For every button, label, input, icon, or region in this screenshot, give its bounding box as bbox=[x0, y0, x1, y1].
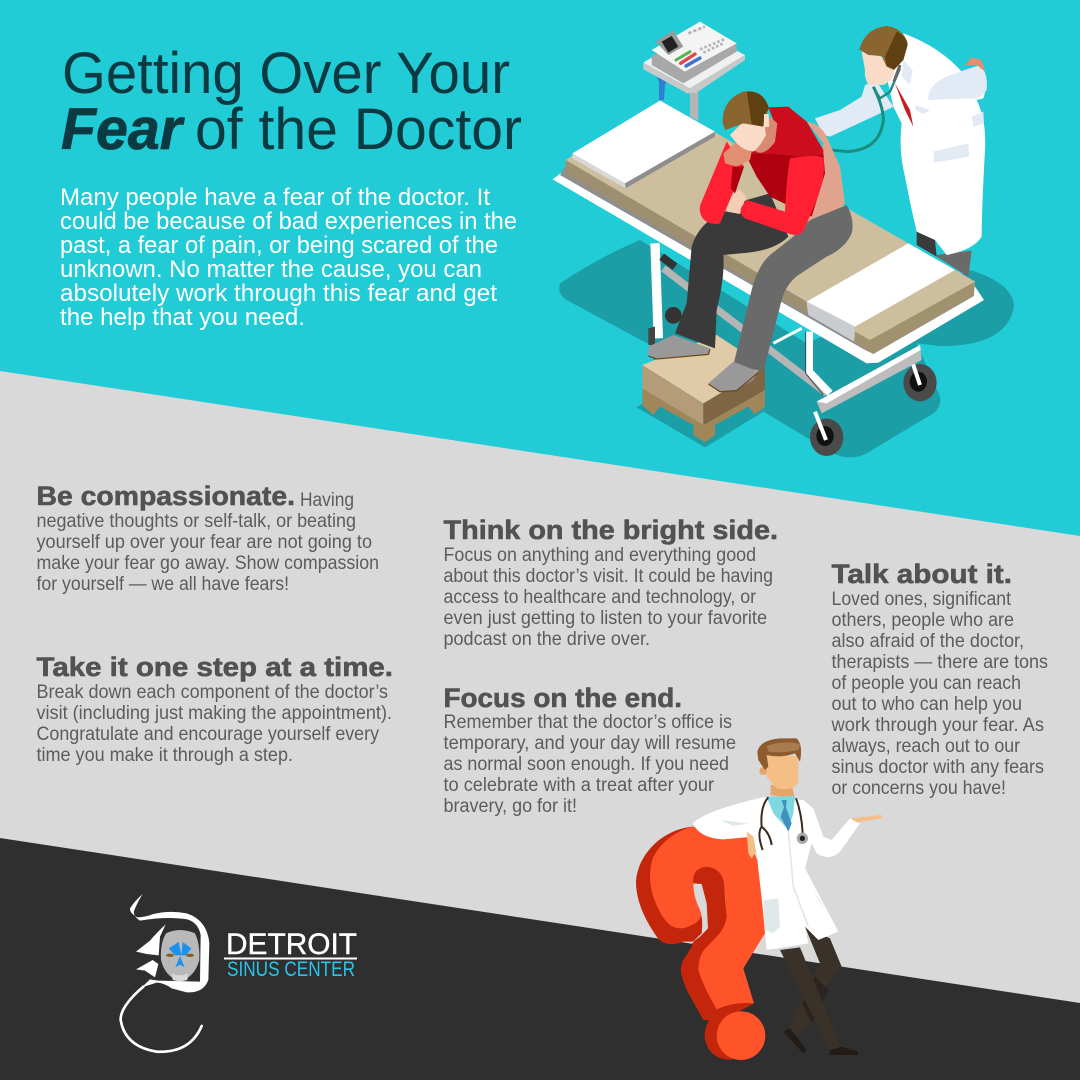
tip: talk about it: work through your fear. As bbox=[831, 715, 1044, 736]
tip: take it one step at a time: Break down each component of the doctor’s bbox=[36, 682, 388, 703]
tip: be compassionate: for yourself — we all have fears! bbox=[36, 574, 289, 595]
intro paragraph: past, a fear of pain, or being scared of the bbox=[60, 232, 498, 259]
title: Fear bbox=[61, 97, 185, 162]
logo: Detroit Sinus Center: SINUS CENTER bbox=[227, 958, 355, 981]
tip: take it one step at a time: visit (including just making the appointment). bbox=[36, 703, 392, 724]
tip: focus on the end: Focus on the end. bbox=[444, 683, 682, 713]
tip: be compassionate bbox=[36, 481, 379, 595]
tip: talk about it: Loved ones, significant bbox=[832, 589, 1012, 610]
tip: focus on the end: Remember that the doctor’s office is bbox=[444, 712, 732, 733]
tip: focus on the end: to celebrate with a treat after your bbox=[444, 775, 715, 796]
title bbox=[61, 41, 522, 162]
tip: talk about it bbox=[831, 559, 1048, 799]
tip: focus on the end: bravery, go for it! bbox=[444, 796, 577, 817]
intro paragraph: absolutely work through this fear and get bbox=[60, 280, 497, 307]
tip: think on the bright side: Think on the bright side. bbox=[444, 515, 778, 545]
logo: Detroit Sinus Center bbox=[121, 894, 357, 1052]
tip: focus on the end: as normal soon enough. If you need bbox=[444, 754, 729, 775]
logo mark bbox=[121, 894, 209, 1052]
doctor with stethoscope bbox=[815, 26, 987, 277]
tip: think on the bright side: podcast on the drive over. bbox=[444, 629, 650, 650]
tip: think on the bright side: access to healthcare and technology, or bbox=[444, 587, 757, 608]
illustration: patient on exam table with doctor bbox=[553, 22, 1014, 457]
illustration: doctor leaning on question mark bbox=[636, 738, 882, 1060]
tip: talk about it: always, reach out to our bbox=[832, 736, 1021, 757]
intro paragraph bbox=[60, 184, 517, 331]
title: Getting Over Your bbox=[62, 41, 510, 106]
tip: think on the bright side: Focus on anything and everything good bbox=[444, 545, 756, 566]
tip: take it one step at a time bbox=[36, 652, 393, 766]
tip: be compassionate: Be compassionate. bbox=[36, 481, 295, 511]
intro paragraph: could be because of bad experiences in the bbox=[60, 208, 517, 235]
tip: talk about it: of people you can reach bbox=[832, 673, 1021, 694]
intro paragraph: Many people have a fear of the doctor. It bbox=[60, 184, 490, 211]
patient bbox=[648, 91, 853, 392]
tip: talk about it: therapists — there are tons bbox=[832, 652, 1048, 673]
tip: think on the bright side: even just getting to listen to your favorite bbox=[444, 608, 767, 629]
tip: talk about it: sinus doctor with any fears bbox=[832, 757, 1044, 778]
stool bbox=[642, 335, 765, 442]
tip: talk about it: also afraid of the doctor, bbox=[832, 631, 1024, 652]
intro paragraph: unknown. No matter the cause, you can bbox=[60, 256, 482, 283]
mattress bbox=[566, 101, 975, 354]
tip: talk about it: others, people who are bbox=[832, 610, 1014, 631]
tip: take it one step at a time: Congratulate and encourage yourself every bbox=[36, 724, 379, 745]
floor shadow bbox=[559, 240, 1014, 457]
table frame bbox=[553, 170, 984, 363]
tip: be compassionate: make your fear go away. Show compassion bbox=[36, 553, 379, 574]
tip: be compassionate: yourself up over your fear are not going to bbox=[36, 532, 372, 553]
tip: take it one step at a time: Take it one step at a time. bbox=[36, 652, 393, 682]
tip: be compassionate: negative thoughts or self-talk, or beating bbox=[36, 511, 356, 532]
standing doctor bbox=[693, 738, 882, 1055]
logo wordmark: DETROIT bbox=[226, 928, 357, 961]
tip: focus on the end: temporary, and your day will resume bbox=[444, 733, 736, 754]
table legs and wheels bbox=[648, 243, 937, 456]
tip: talk about it: or concerns you have! bbox=[832, 778, 1006, 799]
monitor cart bbox=[643, 22, 745, 121]
tip: take it one step at a time: time you make it through a step. bbox=[36, 745, 293, 766]
tip: be compassionate: Having bbox=[300, 490, 354, 511]
intro paragraph: the help that you need. bbox=[60, 304, 305, 331]
question mark bbox=[636, 827, 765, 1060]
tip: talk about it: out to who can help you bbox=[832, 694, 1022, 715]
tip: think on the bright side bbox=[444, 515, 778, 650]
tip: think on the bright side: about this doctor’s visit. It could be having bbox=[444, 566, 773, 587]
tip: talk about it: Talk about it. bbox=[832, 559, 1012, 589]
title: of the Doctor bbox=[195, 97, 522, 162]
tip: focus on the end bbox=[444, 683, 736, 817]
